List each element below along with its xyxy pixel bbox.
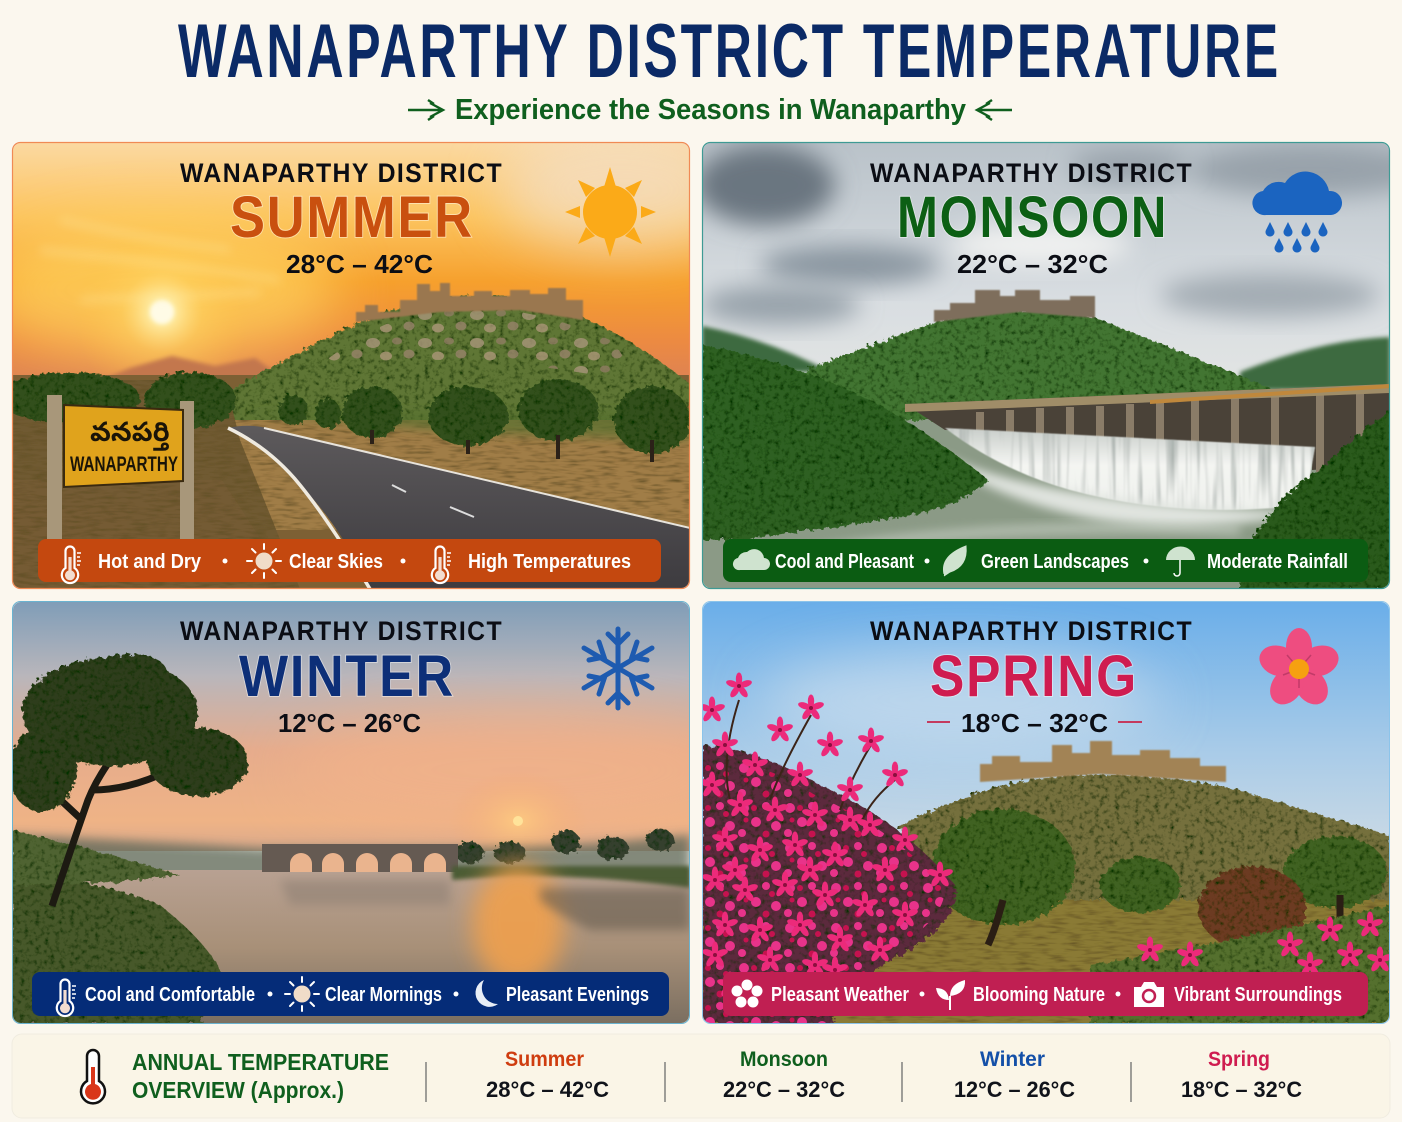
- spring info pill: [723, 972, 1368, 1016]
- panel: annual temperature overview: [12, 1034, 1390, 1118]
- monsoon overview: 22°C – 32°C: [723, 1077, 845, 1102]
- panel border: winter: [12, 602, 690, 1024]
- monsoon season name: MONSOON: [897, 185, 1168, 250]
- text: pleasant weather: Pleasant Weather: [771, 984, 909, 1006]
- winter overview: [954, 1048, 1075, 1102]
- icon: umbrella: [1166, 547, 1195, 576]
- winter overview: Winter: [980, 1048, 1045, 1071]
- winter info pill: [32, 972, 669, 1016]
- subtitle with arrows: Experience the Seasons in Wanaparthy: [455, 94, 966, 126]
- panel border: summer: [12, 142, 690, 588]
- icon: thermometer: [432, 546, 451, 583]
- text: hot and dry: Hot and Dry: [98, 551, 202, 573]
- spring season name: SPRING: [930, 644, 1138, 709]
- text: moderate rainfall: Moderate Rainfall: [1207, 551, 1348, 573]
- panel border: monsoon: [702, 142, 1390, 588]
- summer overview: Summer: [505, 1048, 584, 1071]
- icon: sun: [565, 167, 656, 257]
- road sign with post: వనపర్తి: [90, 417, 170, 451]
- icon: sprout: [936, 980, 965, 1010]
- panel border: spring: [702, 602, 1390, 1024]
- spring heading: WANAPARTHY DISTRICT: [870, 616, 1193, 646]
- text: cool and pleasant: Cool and Pleasant: [775, 551, 914, 573]
- summer temperature range: 28°C – 42°C: [286, 249, 433, 279]
- spring overview: Spring: [1208, 1048, 1270, 1071]
- panel: monsoon: [695, 142, 1402, 590]
- spring overview: 18°C – 32°C: [1181, 1077, 1302, 1102]
- summer overview: [486, 1048, 609, 1102]
- monsoon heading: WANAPARTHY DISTRICT: [870, 158, 1193, 188]
- road sign with post: [47, 395, 194, 540]
- panel: spring: [698, 601, 1394, 1025]
- icon: camera: [1134, 982, 1164, 1007]
- icon: thermometer: [62, 546, 81, 583]
- overview heading: OVERVIEW (Approx.): [132, 1077, 344, 1103]
- icon: snowflake: [584, 629, 652, 708]
- icon: sun small: [247, 544, 281, 578]
- winter season name: WINTER: [239, 644, 455, 709]
- summer season name: SUMMER: [230, 185, 474, 250]
- monsoon temperature range: 22°C – 32°C: [957, 249, 1108, 279]
- icon: crescent moon: [476, 980, 498, 1007]
- monsoon info pill: [723, 539, 1368, 582]
- text: cool and comfortable: Cool and Comfortable: [85, 984, 255, 1006]
- winter scene: sunset sky, tree, bridge and river: [8, 601, 750, 1025]
- text: clear mornings: Clear Mornings: [325, 984, 442, 1006]
- icon: thermometer: [57, 980, 76, 1016]
- overview heading: [132, 1049, 389, 1103]
- spring temperature range: 18°C – 32°C: [961, 708, 1108, 738]
- summer scene: sky, hill, road and trees: [13, 143, 689, 588]
- winter temperature range: 12°C – 26°C: [278, 708, 421, 738]
- icon: cloud: [733, 549, 770, 570]
- text: vibrant surroundings: Vibrant Surroundings: [1174, 984, 1342, 1006]
- monsoon scene: clouds, hill, dam and river: [695, 142, 1402, 590]
- monsoon overview: [723, 1048, 845, 1102]
- text: green landscapes: Green Landscapes: [981, 551, 1129, 573]
- panel: winter: [8, 601, 750, 1025]
- spring scene: blue sky, fort hill and pink flowers: [698, 601, 1394, 1025]
- summer info pill: [38, 539, 661, 583]
- text: high temperatures: High Temperatures: [468, 551, 631, 573]
- text: blooming nature: Blooming Nature: [973, 984, 1105, 1006]
- text: pleasant evenings: Pleasant Evenings: [506, 984, 649, 1006]
- spring overview: [1181, 1048, 1302, 1102]
- panel: summer: [12, 142, 690, 590]
- overview heading: ANNUAL TEMPERATURE: [132, 1049, 389, 1075]
- icon: rain cloud: [1252, 172, 1342, 253]
- summer overview: 28°C – 42°C: [486, 1077, 609, 1102]
- icon: leaf: [943, 546, 966, 576]
- icon: thermometer overview: [81, 1050, 105, 1103]
- monsoon overview: Monsoon: [740, 1048, 828, 1071]
- icon: flower: [1255, 628, 1343, 711]
- icon: sun small: [285, 977, 319, 1011]
- text: clear skies: Clear Skies: [289, 551, 383, 573]
- winter heading: WANAPARTHY DISTRICT: [180, 616, 503, 646]
- road sign with post: WANAPARTHY: [70, 453, 178, 476]
- summer heading: WANAPARTHY DISTRICT: [180, 158, 503, 188]
- winter overview: 12°C – 26°C: [954, 1077, 1075, 1102]
- icon: blossom: [732, 980, 762, 1008]
